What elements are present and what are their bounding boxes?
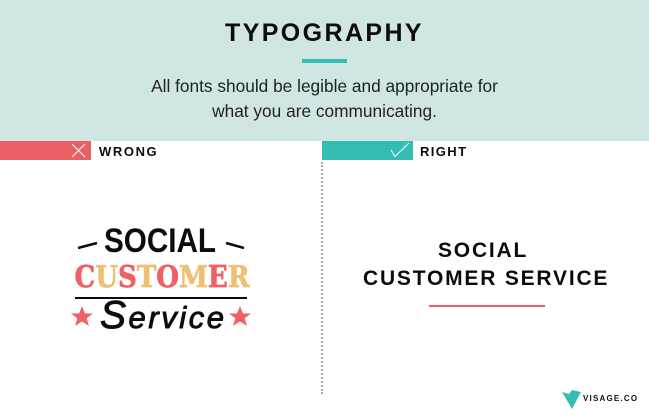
left star [71,306,93,326]
right star [229,306,251,326]
brand name: VISAGE.CO [583,394,638,403]
icon: cross [72,144,86,158]
right example text [363,239,609,290]
right example text: SOCIAL [438,239,528,262]
wrong label bar [0,141,91,160]
rule [75,297,247,299]
customer word: CUSTOMER [74,260,250,295]
description text [151,76,498,121]
right label bar [322,141,413,160]
right label: RIGHT [420,144,467,159]
icon: check [390,142,410,158]
icon: visage mark [562,390,581,409]
description text: what you are communicating. [212,101,437,121]
right example text: CUSTOMER SERVICE [363,267,609,290]
right dash [226,243,244,248]
wrong label: WRONG [99,144,158,159]
right example underline [429,305,545,307]
title: TYPOGRAPHY [225,19,424,47]
title underline [302,59,347,63]
wrong logo example [71,222,251,337]
dotted divider [321,162,323,394]
social word: SOCIAL [104,222,216,260]
description text: All fonts should be legible and appropriate for [151,76,498,96]
service word: Service [100,294,224,337]
brand logo [562,390,638,409]
left dash [78,243,97,248]
header panel [0,0,649,141]
